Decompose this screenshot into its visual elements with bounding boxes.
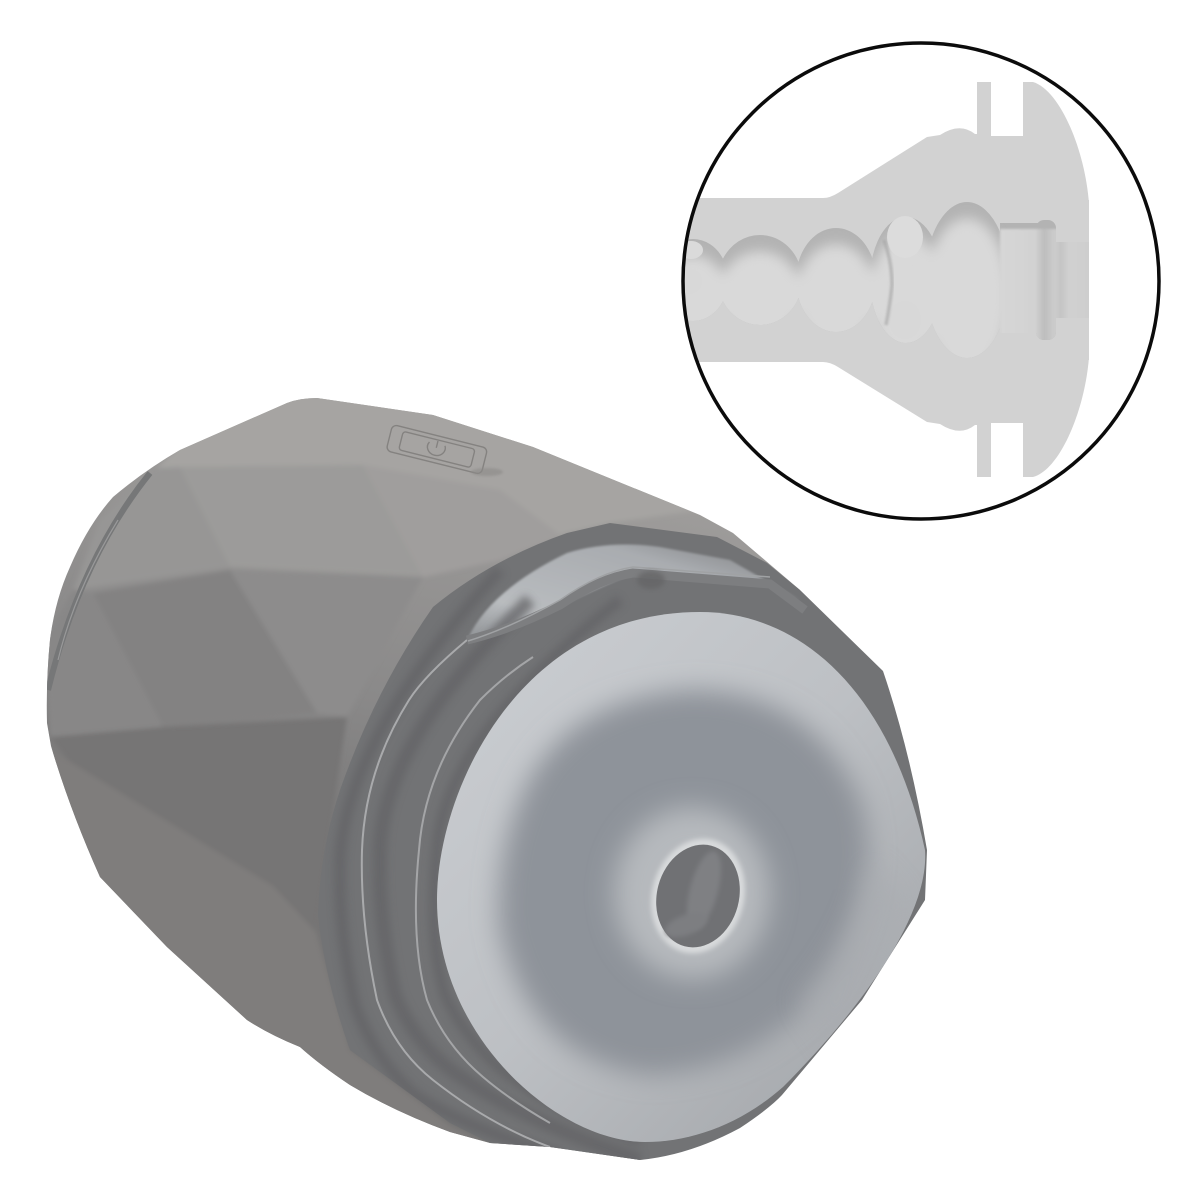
lower-right lightening [800,860,905,1060]
inset: cross-section circle [658,43,1159,519]
rim pinch [637,571,665,589]
opening rim [639,828,757,964]
logo [386,425,488,474]
ring highlights [362,567,805,1147]
circle outline [683,43,1159,519]
collar band [318,523,927,1160]
opening [645,835,751,957]
end-ring crescent [48,473,150,690]
glossy dome [469,544,765,635]
logo dot [471,468,503,476]
sleeve cross-section [680,82,1089,477]
lighter halo around opening [614,807,770,979]
translucent end cap [437,612,925,1142]
inner cavity [688,202,1064,340]
inner shaded core [499,690,868,1075]
facets [45,390,700,1150]
opening lips [1088,200,1089,360]
grooves [340,570,640,1160]
product body [45,390,800,1160]
nubs [686,216,923,326]
collar rings [318,523,927,1160]
